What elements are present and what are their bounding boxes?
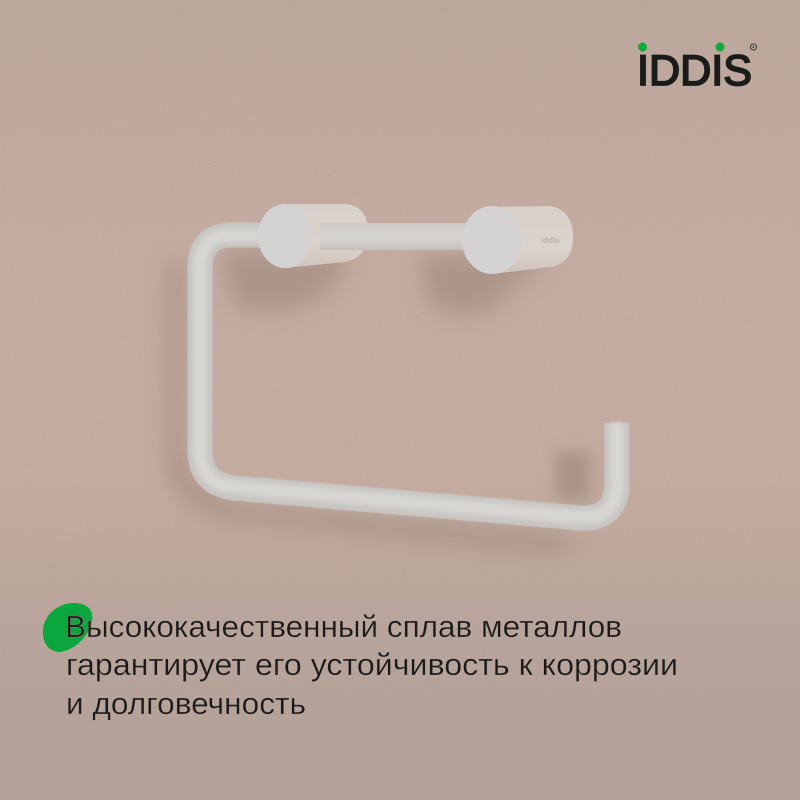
horizontal bar xyxy=(320,223,468,250)
caption text: Высококачественный сплав металлов xyxy=(65,609,622,644)
logo: IDDIS: IDDIS xyxy=(637,47,752,95)
toilet paper holder xyxy=(200,204,617,518)
green accent blob xyxy=(43,603,92,652)
holder: bent tube base xyxy=(200,235,617,518)
caption text: и долговечность xyxy=(66,686,306,721)
right mount cylinder body xyxy=(492,206,573,274)
caption text xyxy=(65,609,678,721)
right mount cylinder face xyxy=(462,206,522,274)
caption text: гарантирует его устойчивость к коррозии xyxy=(66,647,678,682)
holder: bent tube highlight xyxy=(200,235,617,517)
engraved mark: iddis xyxy=(541,236,560,245)
left mount cylinder xyxy=(258,204,368,268)
cast shadows on wall xyxy=(168,250,590,552)
